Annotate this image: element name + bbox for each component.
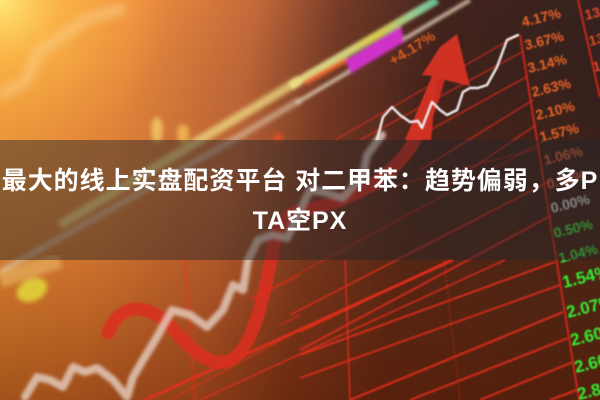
green lower labels — [560, 262, 600, 400]
diagonal grid lines — [145, 35, 577, 400]
percentage axis labels: 2.10% — [534, 98, 577, 123]
+4.17% chart label: +4.17% — [386, 28, 439, 69]
percentage axis labels: 0.53% — [545, 167, 588, 192]
white price line — [25, 35, 518, 397]
percentage axis labels: 2.63% — [530, 75, 573, 100]
percentage axis labels: 1.06% — [542, 143, 585, 168]
percentage axis labels: 0.50% — [552, 216, 595, 241]
red swoosh arrow — [108, 34, 470, 362]
percentage axis labels: 0.00% — [549, 191, 592, 216]
yellow glow spots — [0, 260, 60, 307]
blurred left part of ticker strip — [0, 80, 300, 272]
percentage axis labels: 1.57% — [538, 120, 581, 145]
multicolour ticker strip — [290, 0, 470, 103]
title band — [0, 140, 600, 260]
far right column numbers — [583, 4, 600, 75]
percentage axis labels: 3.14% — [526, 51, 569, 76]
percentage axis labels: 4.17% — [520, 5, 563, 30]
percentage axis labels: 1.04% — [557, 241, 600, 266]
title line 2: TA空PX — [253, 207, 347, 235]
faint top-left trend line — [0, 8, 125, 95]
title line 1: 最大的线上实盘配资平台 对二甲苯：趋势偏弱，多P — [2, 167, 598, 195]
percentage axis labels — [520, 5, 600, 266]
right axis lines — [520, 0, 600, 400]
percentage axis labels: 3.67% — [523, 28, 566, 53]
